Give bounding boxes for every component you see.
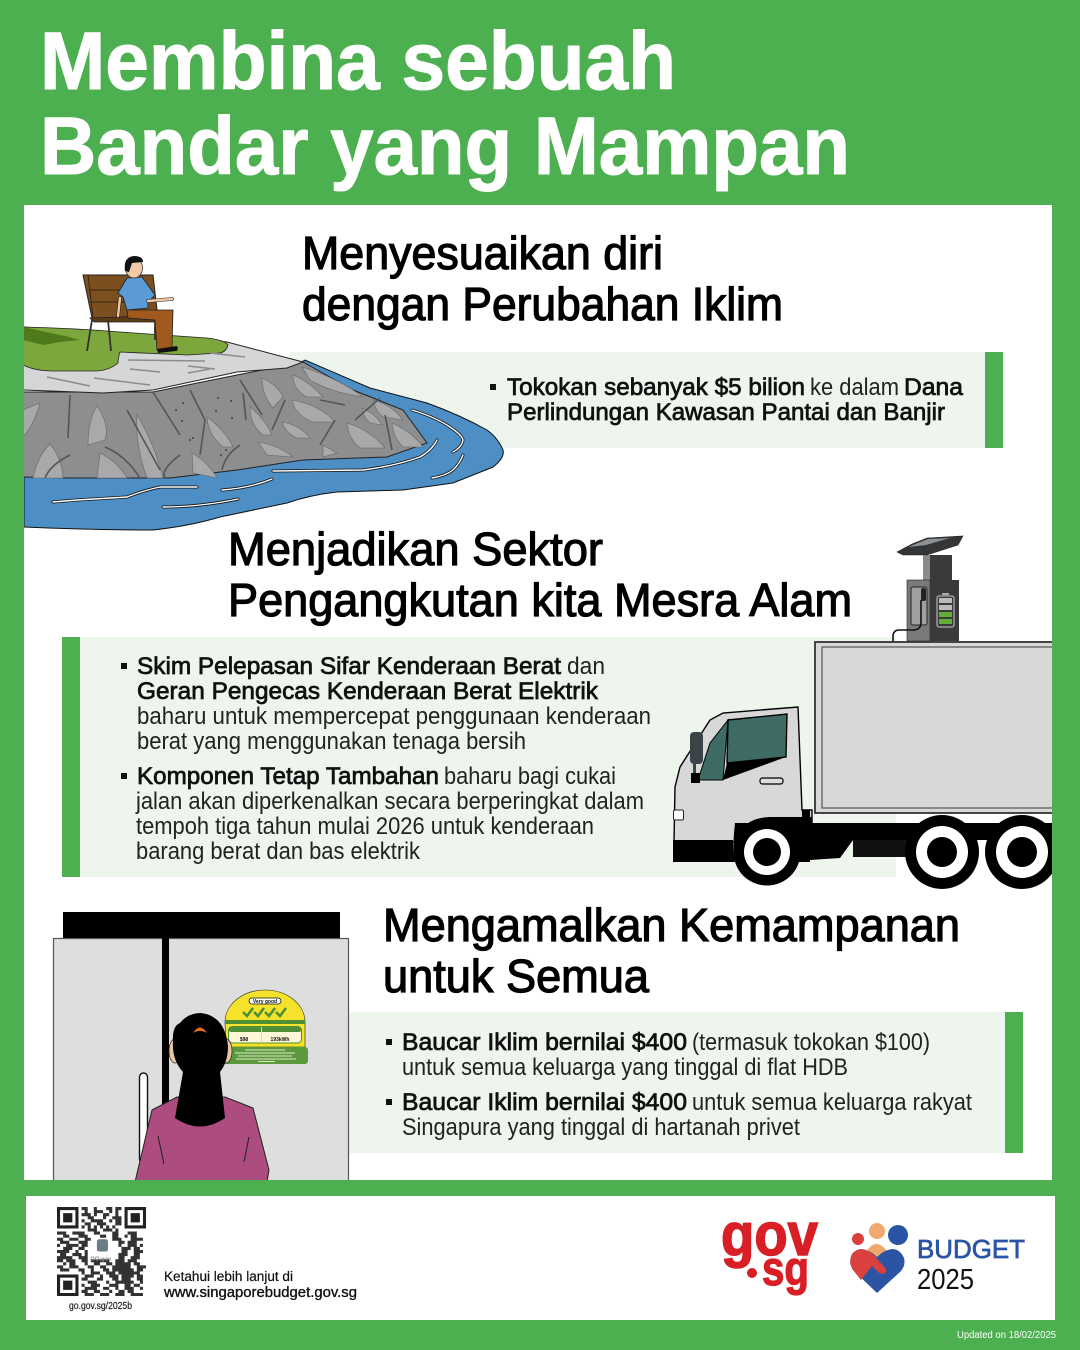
rock speckles (176, 398, 232, 455)
fridge top (63, 912, 340, 938)
truck lower body (673, 810, 853, 862)
QR finder patterns (59, 1209, 144, 1294)
text block: HDB vouchers (386, 1029, 930, 1081)
text block: HDB vouchers: untuk semua keluarga yang tinggal di flat HDB (402, 1054, 848, 1081)
panel accent bar (1005, 1012, 1023, 1153)
heart blue (850, 1249, 904, 1293)
door handle (760, 778, 783, 784)
heading: transport (228, 523, 852, 626)
panel: adapting to climate change (290, 352, 1003, 448)
hair (125, 256, 143, 272)
bench seat (90, 316, 158, 322)
footer panel (26, 1196, 1055, 1320)
battery level (937, 596, 954, 627)
title: Bandar yang Mampan (40, 101, 850, 192)
heading: sustainability for all: untuk Semua (383, 950, 649, 1002)
update date: Updated on 18/02/2025 (957, 1330, 1056, 1341)
charger top panel (897, 536, 963, 555)
charging cable (893, 600, 921, 642)
text block: heavy vehicle schemes (121, 653, 651, 755)
text block: road tax component: jalan akan diperkenalkan secara berperingkat dalam (135, 788, 644, 815)
icon: woman at refrigerator (54, 912, 348, 1188)
energy label: 193kWh (271, 1037, 289, 1043)
energy label: Very good (253, 999, 277, 1005)
fridge handle (140, 1073, 148, 1163)
rock facets (23, 367, 423, 478)
shoes (157, 346, 178, 353)
wheel arch (733, 817, 812, 862)
text block: road tax component (121, 763, 644, 865)
cliff rock (23, 362, 427, 478)
mirror (690, 732, 703, 764)
fridge door gap (162, 938, 169, 1108)
text block: road tax component: baharu bagi cukai (444, 763, 616, 790)
text block: coastal fund: ke dalam (810, 374, 899, 401)
arms (118, 298, 172, 316)
truck chassis (811, 823, 1056, 840)
wordmark: BUDGET (917, 1234, 1025, 1264)
icon: man on bench at coastal cliff (23, 256, 503, 530)
fridge body (54, 938, 348, 1188)
panel background (340, 1012, 1005, 1153)
text block: heavy vehicle schemes: berat yang menggunakan tenaga bersih (137, 728, 526, 755)
text block: heavy vehicle schemes: Skim Pelepasan Sifar Kenderaan Berat (137, 653, 561, 680)
QR code: GO.gov (90, 1257, 112, 1263)
side window (727, 714, 787, 763)
label ticks (243, 1008, 286, 1016)
text block: private property vouchers: Baucar Iklim bernilai $400 (402, 1089, 687, 1116)
more information text (163, 1269, 357, 1301)
text block: road tax component: barang berat dan bas elektrik (136, 838, 421, 865)
heading: adapting (302, 227, 783, 330)
charger socket (911, 587, 927, 625)
charger body (907, 580, 930, 641)
people dots (852, 1233, 864, 1245)
logo: Budget 2025: 2025 (917, 1264, 974, 1296)
panel accent bar (985, 352, 1003, 448)
grass (23, 327, 228, 371)
front wheel (735, 829, 799, 886)
QR logo (97, 1239, 108, 1252)
main white panel (24, 205, 1052, 1180)
more information text: www.singaporebudget.gov.sg (163, 1285, 357, 1301)
cliff top ground (23, 327, 303, 393)
logo: Budget 2025 (850, 1223, 1025, 1296)
text block: heavy vehicle schemes: baharu untuk mempercepat penggunaan kenderaan (137, 703, 651, 730)
cargo box inner line (822, 647, 1062, 808)
dark grass tufts (23, 327, 80, 345)
top creases (158, 1136, 249, 1164)
label rating pill (249, 998, 281, 1004)
truck cab (674, 707, 812, 842)
text block: coastal fund (490, 374, 963, 426)
panel background (290, 352, 985, 448)
hair (173, 1013, 228, 1126)
heart left red (850, 1249, 886, 1280)
bench back (83, 275, 157, 319)
QR link: go.gov.sg/2025b (69, 1301, 132, 1312)
heading: transport: Pengangkutan kita Mesra Alam (228, 574, 852, 626)
text block: heavy vehicle schemes: Geran Pengecas Kenderaan Berat Elektrik (137, 678, 599, 705)
energy label: $98 (240, 1037, 248, 1043)
text block: private property vouchers: untuk semua keluarga rakyat (692, 1089, 972, 1116)
heading: adapting: Menyesuaikan diri (302, 227, 663, 279)
icon: electric truck (673, 642, 1062, 889)
energy label (223, 990, 308, 1064)
text block: coastal fund: Perlindungan Kawasan Pantai dan Banjir (507, 399, 945, 426)
text block: road tax component: tempoh tiga tahun mulai 2026 untuk kenderaan (136, 813, 594, 840)
label dome (225, 990, 305, 1047)
label footer (223, 1047, 308, 1064)
fuel tank (853, 840, 913, 857)
text block: private property vouchers (386, 1089, 972, 1141)
ears (169, 1039, 181, 1063)
panel: climate vouchers (340, 1012, 1023, 1153)
panel background (80, 637, 896, 877)
charger column (923, 555, 930, 580)
text block: HDB vouchers: Baucar Iklim bernilai $400 (402, 1029, 687, 1056)
water (24, 360, 503, 530)
QR modules (57, 1209, 146, 1294)
hair clip (193, 1028, 207, 1033)
text block: coastal fund: Dana (904, 374, 963, 401)
woman top (135, 1097, 269, 1182)
QR code (57, 1209, 146, 1294)
heading: sustainability for all: Mengamalkan Kemampanan (383, 899, 960, 951)
ground lines (47, 353, 245, 386)
icon: EV charger (893, 536, 963, 642)
rock cracks (45, 380, 392, 478)
shirt (118, 277, 155, 310)
text block: HDB vouchers: (termasuk tokokan $100) (692, 1029, 930, 1056)
logo: gov.sg (721, 1201, 819, 1296)
bench slats (88, 275, 155, 318)
logo: gov.sg: gov (721, 1201, 819, 1268)
heading: transport: Menjadikan Sektor (228, 523, 603, 575)
windshield (698, 720, 728, 780)
water streak outlines (53, 410, 463, 507)
panel accent bar (62, 637, 80, 877)
water streak highlights (53, 410, 463, 507)
text block: road tax component: Komponen Tetap Tambahan (137, 763, 439, 790)
text block: private property vouchers: Singapura yang tinggal di hartanah privet (402, 1114, 800, 1141)
label data box (228, 1026, 302, 1043)
bench legs (87, 320, 155, 351)
title (40, 16, 850, 192)
middle wheel (905, 815, 979, 889)
headlight (674, 810, 684, 820)
text block: heavy vehicle schemes: dan (567, 653, 605, 680)
text block: coastal fund: Tokokan sebanyak $5 bilion (507, 374, 805, 401)
window shadow (723, 757, 786, 780)
heading: adapting: dengan Perubahan Iklim (302, 278, 783, 330)
trousers (127, 310, 173, 350)
logo: gov.sg: sg (762, 1243, 809, 1296)
heading: sustainability for all (383, 899, 960, 1002)
rear wheel (985, 815, 1059, 889)
head (126, 262, 143, 278)
title: Membina sebuah (40, 16, 676, 107)
panel: green transport (62, 637, 896, 877)
more information text: Ketahui lebih lanjut di (164, 1269, 293, 1284)
label green band (225, 1020, 305, 1024)
truck cargo box (815, 642, 1055, 813)
